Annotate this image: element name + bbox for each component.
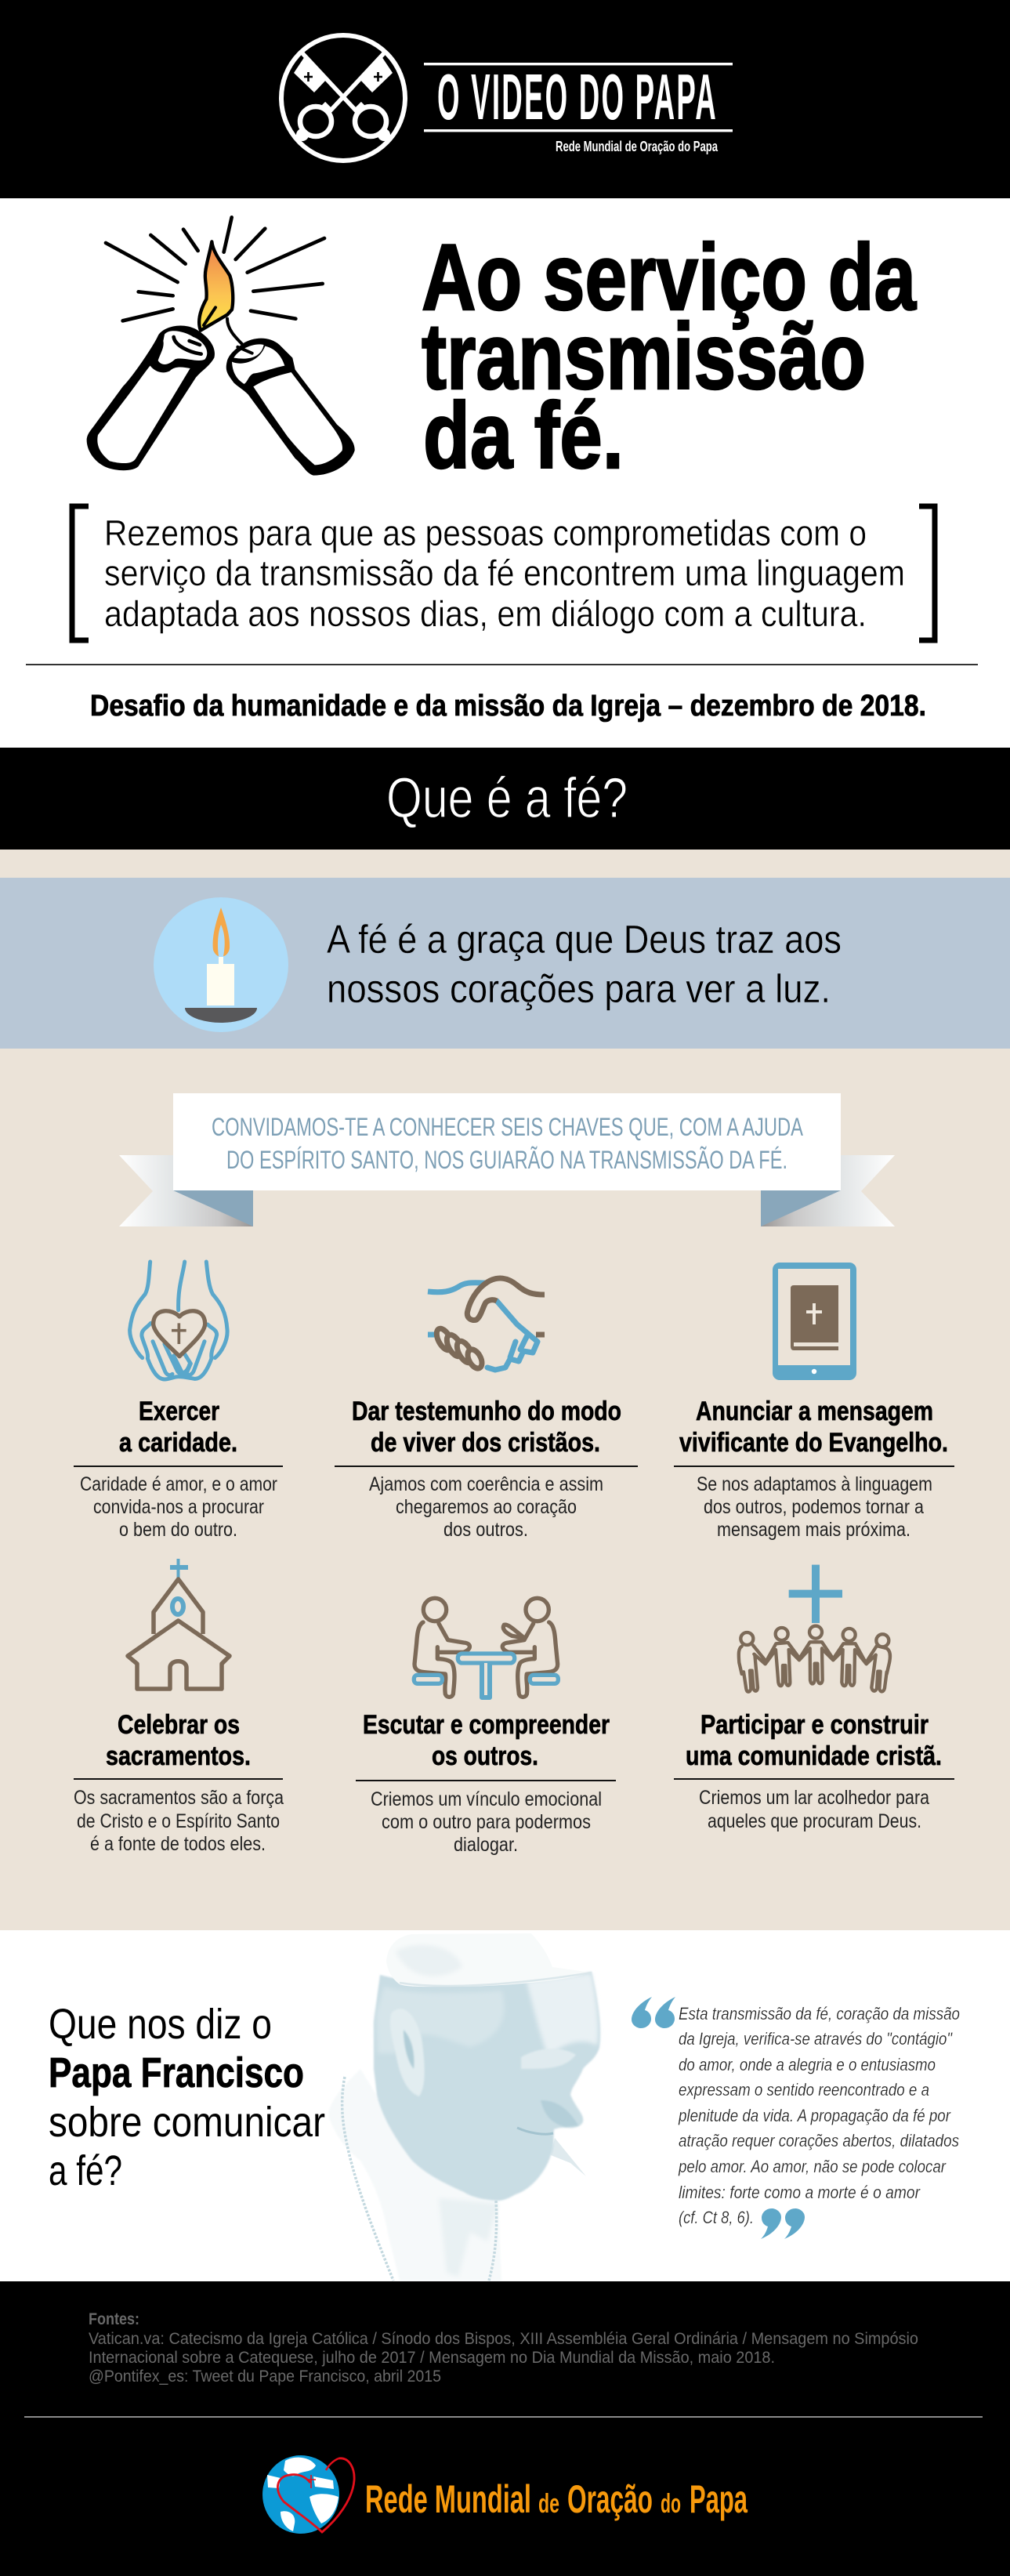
icon: lit candle	[154, 897, 288, 1032]
heading: uma comunidade cristã.	[686, 1741, 942, 1771]
prayer intention text	[104, 513, 905, 634]
quotation text: limites: forte como a morte é o amor	[679, 2183, 921, 2202]
panel: key 1 charity	[74, 1262, 283, 1541]
heading: vivificante do Evangelho.	[679, 1428, 948, 1458]
quotation text	[678, 2004, 960, 2227]
network name: Oração	[567, 2477, 653, 2521]
description	[80, 1473, 277, 1541]
quotation text: atração requer corações abertos, dilatados	[679, 2131, 959, 2150]
logo wordmark: Rede Mundial de Oração do Papa	[556, 139, 719, 154]
description: Ajamos com coerência e assim	[369, 1473, 603, 1495]
section heading band: Que é a fé?	[386, 767, 628, 830]
description	[371, 1788, 602, 1856]
heading: sacramentos.	[106, 1741, 251, 1771]
description	[697, 1473, 932, 1541]
description: Caridade é amor, e o amor	[80, 1473, 277, 1495]
header band	[0, 0, 1010, 198]
definition text: nossos corações para ver a luz.	[327, 966, 831, 1011]
network name: de	[538, 2489, 559, 2519]
quotation text: do amor, onde a alegria e o entusiasmo	[679, 2055, 936, 2074]
icon: two candles sharing a flame	[87, 217, 355, 476]
heading: Que nos diz o	[49, 2001, 272, 2048]
bracket: right	[919, 506, 935, 640]
panel: key 5 listen	[356, 1598, 616, 1856]
heading: Dar testemunho do modo	[352, 1397, 621, 1426]
icon: tablet with bible	[773, 1263, 856, 1380]
heading: Celebrar os	[118, 1710, 240, 1740]
heading: Participar e construir	[700, 1710, 929, 1740]
prayer intention text: Rezemos para que as pessoas comprometidas com o	[104, 513, 867, 553]
network name: do	[661, 2489, 681, 2519]
heading: a fé?	[49, 2147, 122, 2194]
description: dos outros.	[443, 1519, 528, 1541]
quotation text: (cf. Ct 8, 6).	[679, 2208, 754, 2227]
description: dos outros, podemos tornar a	[704, 1496, 924, 1518]
heading: a caridade.	[119, 1428, 237, 1458]
description: com o outro para podermos	[382, 1811, 591, 1833]
icon: crossed keys logo	[281, 35, 405, 161]
quotation text: da Igreja, verifica-se através do "contágio"	[679, 2029, 953, 2049]
panel: key 4 sacraments	[74, 1559, 284, 1855]
title: da fé.	[423, 383, 624, 488]
description	[369, 1473, 603, 1541]
ribbon banner: DO ESPÍRITO SANTO, NOS GUIARÃO NA TRANSMISSÃO DA FÉ.	[226, 1146, 787, 1174]
icon: opening quotation mark	[632, 1997, 675, 2028]
description: é a fonte de todos eles.	[90, 1833, 266, 1855]
sources	[89, 2310, 918, 2386]
network name: Rede Mundial	[365, 2477, 531, 2521]
title	[422, 225, 917, 488]
description: Criemos um lar acolhedor para	[699, 1787, 929, 1809]
heading	[679, 1397, 948, 1458]
icon: closing quotation mark	[761, 2208, 805, 2239]
network name	[365, 2477, 748, 2521]
heading: sobre comunicar	[49, 2099, 325, 2146]
title: transmissão	[422, 304, 866, 409]
quotation text: pelo amor. Ao amor, não se pode colocar	[678, 2157, 947, 2176]
icon: community under a cross	[739, 1565, 890, 1692]
description: convida-nos a procurar	[93, 1496, 264, 1518]
footer band	[0, 2281, 1010, 2576]
section heading band	[0, 748, 1010, 850]
quotation text: expressam o sentido reencontrado e a	[679, 2080, 929, 2100]
definition text	[327, 917, 842, 1011]
panel: beige background	[0, 850, 1010, 1930]
sources: @Pontifex_es: Tweet du Pape Francisco, abril 2015	[89, 2368, 441, 2386]
sources: Fontes:	[89, 2310, 139, 2328]
panel: key 3 announce	[674, 1263, 954, 1541]
icon: globe and heart logo	[262, 2455, 354, 2534]
sources: Internacional sobre a Catequese, julho de 2017 / Mensagem no Dia Mundial da Missão, maio 2018.	[89, 2349, 775, 2367]
description: Se nos adaptamos à linguagem	[697, 1473, 932, 1495]
panel: Pope Francis quote	[0, 1930, 1010, 2281]
heading: Anunciar a mensagem	[696, 1397, 933, 1426]
heading	[49, 2001, 325, 2194]
heading	[119, 1397, 237, 1458]
panel: key 6 community	[674, 1565, 954, 1832]
icon: church	[128, 1559, 230, 1689]
ribbon banner	[119, 1093, 895, 1226]
heading	[106, 1710, 251, 1771]
heading: os outros.	[432, 1741, 538, 1771]
description	[699, 1787, 929, 1832]
heading: Papa Francisco	[49, 2049, 304, 2096]
network name: Papa	[690, 2477, 748, 2521]
heading: de viver dos cristãos.	[371, 1428, 600, 1458]
quotation text: Esta transmissão da fé, coração da missão	[679, 2004, 960, 2023]
description: mensagem mais próxima.	[717, 1519, 910, 1541]
description: Criemos um vínculo emocional	[371, 1788, 602, 1810]
description: aqueles que procuram Deus.	[708, 1810, 921, 1832]
prayer intention text: adaptada aos nossos dias, em diálogo com a cultura.	[104, 593, 867, 634]
description	[74, 1787, 284, 1855]
icon: handshake	[428, 1278, 545, 1371]
icon: hands holding heart	[130, 1262, 227, 1379]
bracket: left	[72, 506, 89, 640]
panel: definition of faith	[0, 878, 1010, 1049]
description: Os sacramentos são a força	[74, 1787, 284, 1809]
heading: Escutar e compreender	[363, 1710, 610, 1740]
subtitle: challenge and date: Desafio da humanidade e da missão da Igreja – dezembro de 2018.	[90, 690, 926, 723]
prayer intention text: serviço da transmissão da fé encontrem uma linguagem	[104, 553, 905, 593]
description: o bem do outro.	[119, 1519, 237, 1541]
ribbon banner: CONVIDAMOS-TE A CONHECER SEIS CHAVES QUE, COM A AJUDA	[212, 1113, 803, 1141]
icon: two people at a table	[414, 1598, 558, 1697]
heading	[363, 1710, 610, 1771]
logo wordmark	[424, 60, 733, 154]
heading: Exercer	[139, 1397, 219, 1426]
heading	[352, 1397, 621, 1458]
quotation text: plenitude da vida. A propagação da fé por	[678, 2106, 951, 2125]
description: de Cristo e o Espírito Santo	[77, 1810, 280, 1832]
definition text: A fé é a graça que Deus traz aos	[327, 917, 842, 962]
description: chegaremos ao coração	[396, 1496, 577, 1518]
sources: Vatican.va: Catecismo da Igreja Católica / Sínodo dos Bispos, XIII Assembléia Geral Ordinária / Mensagem no Simpósio	[89, 2330, 918, 2348]
illustration: Pope Francis portrait	[328, 1933, 600, 2281]
heading	[686, 1710, 942, 1771]
panel: key 2 witness	[335, 1278, 638, 1541]
description: dialogar.	[454, 1834, 518, 1856]
